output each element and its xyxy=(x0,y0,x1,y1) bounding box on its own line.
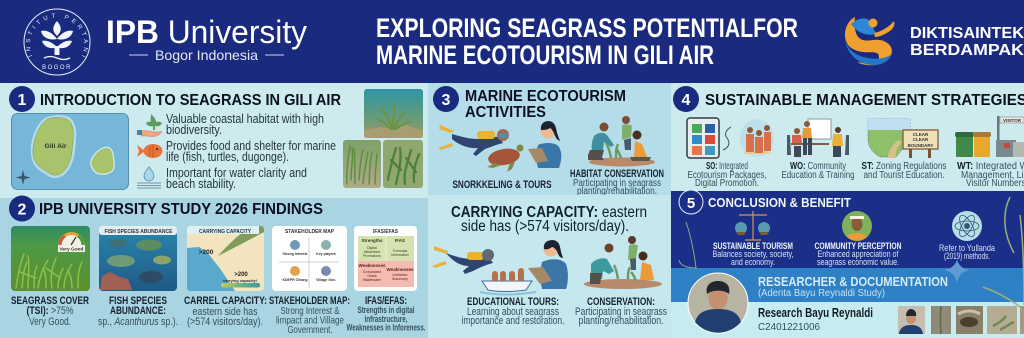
card: carrying capacity: >200 xyxy=(199,249,214,256)
card: IFAS/EFAS: Crowdsized xyxy=(363,270,381,274)
heading: activities: MARINE ECOTOURISM xyxy=(465,88,626,105)
panel: introduction to seagrass xyxy=(0,83,428,198)
header banner xyxy=(0,0,1024,83)
caption: educational tours: Learning about seagrass xyxy=(467,306,559,318)
bullet: biodiversity: biodiversity. xyxy=(166,123,222,137)
heading: carrying capacity: side has (>574 visitors/day). xyxy=(461,218,629,235)
caption: educational tours: importance and restoration. xyxy=(462,315,564,327)
bullet: food and shelter xyxy=(166,139,336,164)
caption: IFAS/EFAS xyxy=(346,295,426,332)
photo: seagrass close up xyxy=(383,140,423,188)
panel: conclusion and benefit xyxy=(671,190,1024,268)
section number 5: 5 xyxy=(687,195,695,212)
decorative seagrass and sparkle xyxy=(679,197,1024,309)
caption: educational tours: EDUCATIONAL TOURS: xyxy=(467,296,559,308)
card: IFAS/EFAS: Grass xyxy=(367,274,377,278)
title xyxy=(376,13,798,70)
caption: WO: WO: Community xyxy=(790,161,846,172)
caption: seagrass cover: (TSI): >75% xyxy=(26,305,74,317)
icon: Diktisaintek logo xyxy=(845,17,894,65)
heading: carrying capacity: CARRYING CAPACITY: eastern xyxy=(451,204,647,221)
card: stakeholder map: Key players xyxy=(316,252,336,256)
text: community perception: seagrass economic value. xyxy=(817,257,899,267)
illustration: boat with tourists xyxy=(480,268,536,294)
card: IFAS/EFAS: Autonomy xyxy=(392,277,408,281)
caption: WO xyxy=(782,161,854,181)
section number 3 xyxy=(433,86,459,112)
section number 1: 1 xyxy=(18,92,27,109)
bullet: biodiversity xyxy=(166,112,324,137)
photo: seagrass underwater xyxy=(364,89,423,138)
caption: WT xyxy=(957,161,1024,189)
caption: ST: and Tourist Education. xyxy=(864,170,944,181)
text: community perception: Enhanced appreciation of xyxy=(818,249,899,259)
icon: waste bins and visitor gate xyxy=(955,116,1024,157)
caption: WO: Education & Training xyxy=(782,170,854,181)
heading: introduction: INTRODUCTION TO SEAGRASS IN GILI AIR xyxy=(40,92,341,109)
icon: water drop xyxy=(137,167,161,188)
map of Gili Air xyxy=(12,114,128,190)
section number 5 xyxy=(679,190,703,214)
heading: researcher: RESEARCHER & DOCUMENTATION xyxy=(758,275,948,289)
panel: marine ecotourism activities xyxy=(428,83,671,197)
bullet: water clarity: beach stability. xyxy=(166,177,236,191)
text: community perception xyxy=(814,241,902,267)
card: seagrass cover xyxy=(11,226,90,291)
panel: IPB University study findings xyxy=(0,196,428,338)
caption: conservation xyxy=(575,296,667,327)
text: Yullanda method xyxy=(939,243,995,261)
heading: activities: ACTIVITIES xyxy=(465,104,546,121)
icon: balance scale xyxy=(735,211,770,240)
IPB University wordmark: Bogor Indonesia xyxy=(155,47,258,63)
caption: carrying capacity: (>574 visitors/day). xyxy=(187,316,263,328)
caption: carrying capacity: eastern side has xyxy=(192,306,258,318)
caption: conservation: planting/rehabilitation. xyxy=(578,315,664,327)
card: stakeholder map: Village Gov. xyxy=(316,278,336,282)
card: carrying capacity: CARRYING CAPACITY xyxy=(199,229,251,235)
icon: clear boundary zoning: CLEAR xyxy=(913,132,929,137)
caption: stakeholder map: Strong Interest & xyxy=(280,306,340,317)
card: IFAS/EFAS: Digital xyxy=(367,246,377,250)
bullet: water clarity: Important for water clarity and xyxy=(166,166,307,180)
heading: carrying capacity xyxy=(451,204,647,235)
text: Yullanda method: Refer to Yullanda xyxy=(939,243,995,253)
text: sustainable tourism: Balances society, society, xyxy=(712,249,794,259)
card: carrying capacity: >200 xyxy=(234,272,248,278)
bullet: biodiversity: Valuable coastal habitat with high xyxy=(166,112,324,126)
caption: IFAS/EFAS: IFAS/EFAS: xyxy=(365,295,407,307)
caption: stakeholder map: limpact and Village xyxy=(276,316,344,326)
caption: SO: Ecotourism Packages, xyxy=(688,170,766,181)
caption: stakeholder map: Government. xyxy=(288,325,332,336)
caption: educational tours xyxy=(462,296,564,327)
icon: clear boundary zoning: BOUNDARY xyxy=(908,143,933,148)
caption: fish species: sp., Acanthurus sp.). xyxy=(98,316,178,328)
card: IFAS/EFAS: Limitation xyxy=(393,273,408,277)
IPB University wordmark: IPB University xyxy=(106,14,307,50)
section number 3: 3 xyxy=(442,92,451,109)
heading: activities xyxy=(465,88,626,121)
section number 1 xyxy=(9,86,35,112)
icon: clear boundary zoning: CLEAR xyxy=(913,137,929,142)
caption: conservation: Participating in seagrass xyxy=(575,306,667,318)
illustration: conservation team xyxy=(584,236,662,289)
caption: habitat conservation: Participating in seagrass xyxy=(573,178,661,189)
photo strip: documentation xyxy=(898,306,1024,334)
card: IFAS/EFAS: Promotions xyxy=(363,254,381,258)
icon: fish xyxy=(137,144,162,158)
title: EXPLORING SEAGRASS POTENTIALFOR xyxy=(376,13,798,43)
card: IFAS/EFAS: Attractions xyxy=(364,250,381,254)
caption: snorkeling and tours: SNORKKELING & TOURS xyxy=(452,179,552,191)
card: IFAS/EFAS: Wastewater xyxy=(363,278,382,282)
section number 2: 2 xyxy=(18,202,27,218)
icon: waste bins and visitor gate: VISITOR xyxy=(1003,118,1022,123)
card: IFAS/EFAS: IFAS xyxy=(395,238,405,243)
panel: carrying capacity activities xyxy=(428,195,671,338)
panel: researcher and documentation xyxy=(671,197,1024,338)
icon: community training xyxy=(787,119,849,157)
researcher name and ID: C2401221006 xyxy=(758,321,820,333)
heading: conclusion: CONCLUSION & BENEFIT xyxy=(708,196,851,210)
card: fish species abundance xyxy=(99,226,177,291)
card: IFAS/EFAS: Weaknesses xyxy=(359,263,386,268)
card: IFAS/EFAS: Strengths xyxy=(361,238,383,243)
bullet: food and shelter: Provides food and shelter for marine xyxy=(166,139,336,153)
heading: findings: IPB UNIVERSITY STUDY 2026 FINDINGS xyxy=(39,201,323,218)
illustration: diver xyxy=(432,246,494,274)
text: sustainable tourism: and economy. xyxy=(731,257,775,267)
caption: conservation: CONSERVATION: xyxy=(587,296,655,308)
map of Gili Air: Gili Air xyxy=(44,143,67,150)
section number 4: 4 xyxy=(682,92,691,109)
photo: seagrass meadow xyxy=(343,140,381,188)
caption: habitat conservation: planting/rehabilitation. xyxy=(577,186,657,197)
card: carrying capacity: carrying capacity! xyxy=(223,278,257,283)
illustration: educator with clipboard xyxy=(528,240,568,289)
text: community perception: COMMUNITY PERCEPTION xyxy=(814,241,902,251)
caption: SO: SO: Integrated xyxy=(706,161,748,172)
Diktisaintek wordmark: DIKTISAINTEK xyxy=(910,25,1024,42)
caption: SO xyxy=(688,161,766,189)
card: stakeholder map: KDEPR Chiang xyxy=(282,278,308,282)
card: stakeholder map: Strong Interest xyxy=(283,252,308,256)
caption: IFAS/EFAS: Weaknesses in Inforeness. xyxy=(346,322,426,332)
portrait: researcher xyxy=(688,273,748,333)
bullet: water clarity xyxy=(166,166,307,191)
researcher name and ID xyxy=(758,305,873,333)
caption: fish species: ABUNDANCE: xyxy=(110,305,166,317)
card: IFAS/EFAS: Weaknesses xyxy=(387,267,414,272)
icon: clear boundary zoning xyxy=(868,119,938,158)
caption: IFAS/EFAS: Strengths in digital xyxy=(358,305,414,315)
illustration: habitat conservation team xyxy=(588,116,655,166)
caption: seagrass cover xyxy=(11,295,89,328)
caption: SO: Digital Promotion. xyxy=(695,178,759,189)
card: IFAS/EFAS: Formulas xyxy=(393,249,408,253)
section number 4 xyxy=(673,86,699,112)
gauge: Very Good xyxy=(60,246,84,252)
card: fish species abundance: FISH SPECIES ABUNDANCE xyxy=(104,229,173,235)
section number 2 xyxy=(9,196,35,222)
card: IFAS/EFAS: IFAS/EFAS xyxy=(373,229,398,235)
caption: stakeholder map: STAKEHOLDER MAP: xyxy=(269,295,350,307)
caption: habitat conservation xyxy=(570,168,664,197)
text: sustainable tourism xyxy=(712,241,794,267)
card: IFAS/EFAS: Information xyxy=(391,253,409,257)
title: MARINE ECOTOURISM IN GILI AIR xyxy=(376,40,714,70)
text: sustainable tourism: SUSTAINABLE TOURISM xyxy=(713,241,793,251)
caption: fish species: FISH SPECIES xyxy=(109,295,167,307)
card: stakeholder map xyxy=(272,226,347,291)
caption: seagrass cover: Very Good. xyxy=(29,316,71,328)
icon: hand with seagrass xyxy=(137,114,162,137)
heading: researcher xyxy=(758,275,948,299)
caption: seagrass cover: SEAGRASS COVER xyxy=(11,295,89,307)
illustration: guide with clipboard xyxy=(528,121,561,168)
Diktisaintek wordmark: BERDAMPAK xyxy=(910,42,1024,59)
caption: IFAS/EFAS: infrastructure, xyxy=(364,314,408,324)
icon: community person xyxy=(842,211,872,241)
panel: sustainable management strategies xyxy=(671,83,1024,191)
card: carrying capacity xyxy=(187,226,264,291)
icon: digital promotion xyxy=(687,118,774,158)
researcher name and ID: Research Bayu Reynaldi xyxy=(758,305,873,320)
caption: carrying capacity: CARREL CAPACITY: xyxy=(184,295,267,307)
caption: ST xyxy=(862,161,947,181)
caption: habitat conservation: HABITAT CONSERVATION xyxy=(570,168,664,180)
icon: atom method xyxy=(952,211,982,241)
caption: stakeholder map xyxy=(269,295,350,336)
text: Yullanda method: (2019) methods. xyxy=(944,251,990,261)
Diktisaintek wordmark xyxy=(910,25,1024,59)
card: stakeholder map: STAKEHOLDER MAP xyxy=(285,229,334,235)
icon: IPB University seal: BOGOR xyxy=(42,65,72,71)
icon: IPB University seal xyxy=(24,8,90,76)
bullet: food and shelter: life (fish, turtles, dugonge). xyxy=(166,150,289,164)
heading: researcher: (Adenta Bayu Reynaldi Study) xyxy=(758,288,885,299)
caption: ST: ST: Zoning Regulations xyxy=(862,161,947,172)
caption: carrying capacity xyxy=(184,295,267,328)
card: IFAS/EFAS xyxy=(354,226,417,291)
illustration: snorkeler and turtle xyxy=(438,125,524,172)
caption: fish species xyxy=(98,295,178,328)
